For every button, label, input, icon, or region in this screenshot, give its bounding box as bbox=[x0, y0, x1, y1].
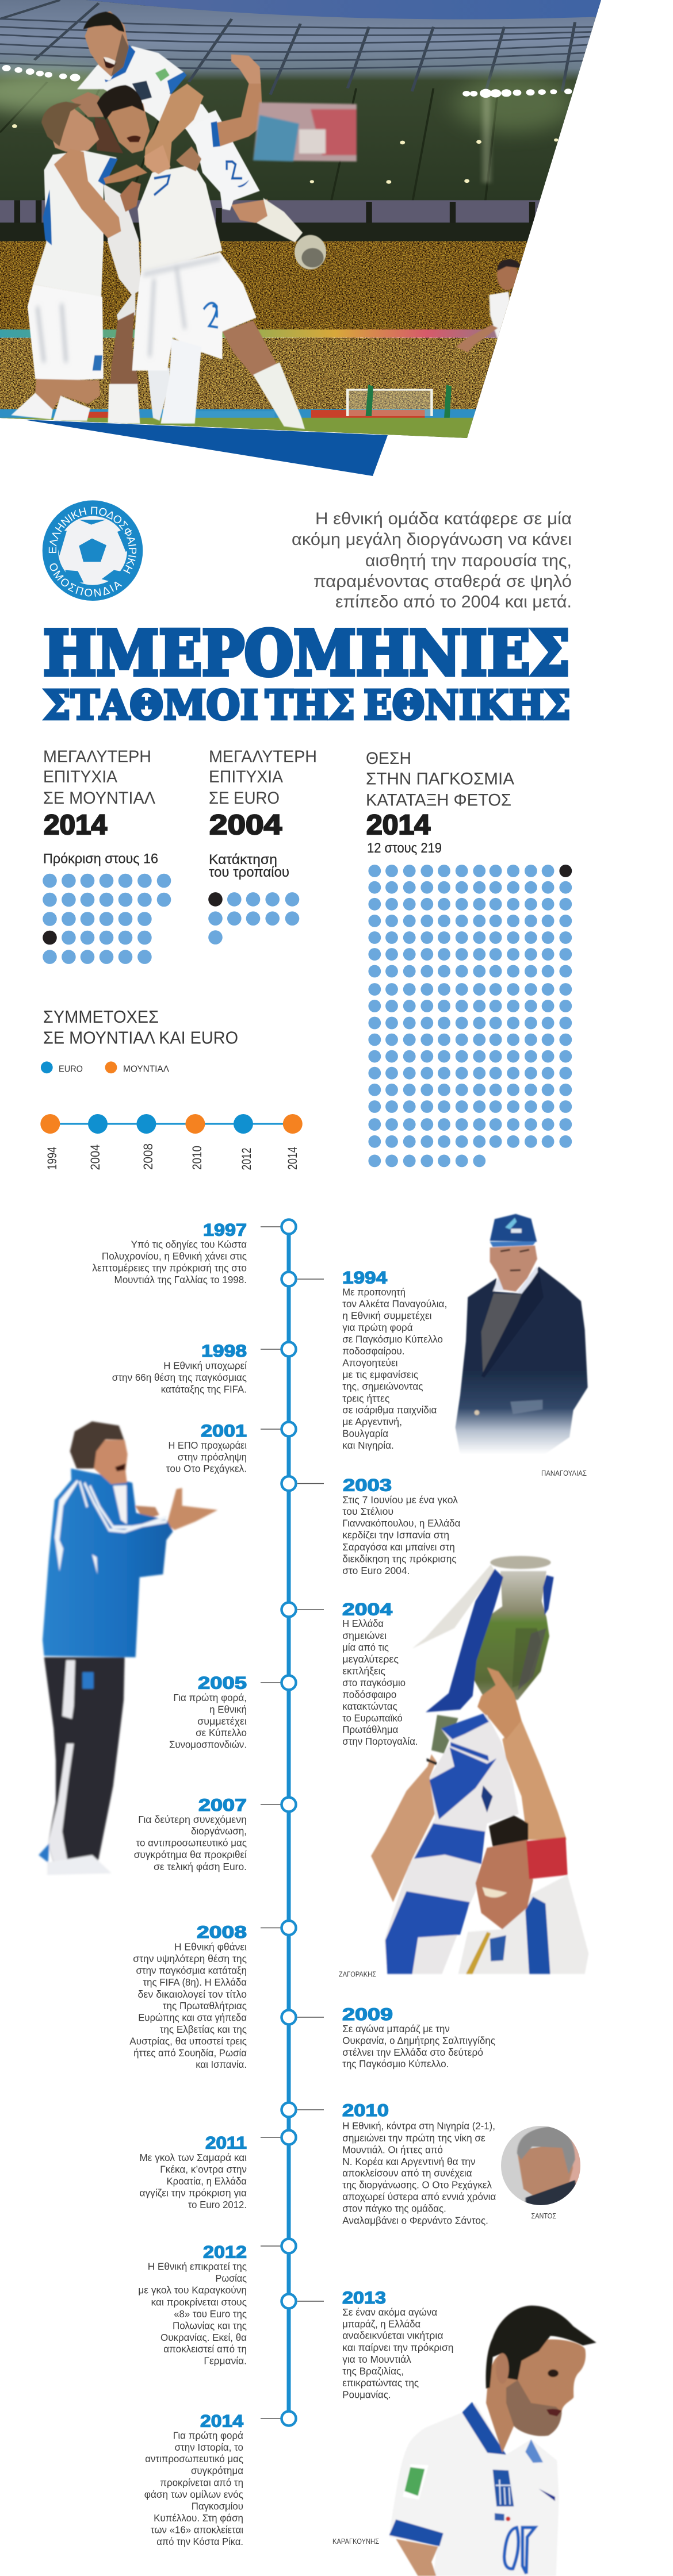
timeline entry: 2010: στον πάγκο της ομάδας. bbox=[342, 2203, 446, 2214]
timeline entry: 2013: Ρουμανίας. bbox=[342, 2389, 391, 2400]
timeline entry: 2011: Με γκολ των Σαμαρά και bbox=[139, 2152, 247, 2163]
timeline entry: 2005: συμμετέχει bbox=[197, 1715, 247, 1727]
timeline entry: 2010: σημειώνει την πρώτη της νίκη σε bbox=[342, 2132, 485, 2144]
title bbox=[43, 617, 571, 729]
timeline entry: 2012: και προκρίνεται στους bbox=[151, 2296, 247, 2308]
timeline entry: 2007: το αντιπροσωπευτικό μας bbox=[136, 1837, 247, 1849]
timeline entry: 2014: αντιπροσωπευτικό μας bbox=[145, 2453, 243, 2464]
panel: FIFA ranking this year bbox=[366, 749, 572, 1167]
timeline entry: 2010: Η Εθνική, κόντρα στη Νιγηρία (2-1), bbox=[342, 2120, 495, 2132]
timeline entry: 1994: της, σημειώνοντας bbox=[342, 1380, 423, 1392]
blue accent wedge bbox=[24, 420, 388, 476]
timeline entry: 2007: διοργάνωση, bbox=[191, 1825, 247, 1837]
timeline entry: 2009: Ουκρανία, ο Δημήτρης Σαλπιγγίδης bbox=[342, 2035, 495, 2047]
dots: 12th of 219 bbox=[368, 865, 572, 1167]
timeline entry: 2004: Πρωτάθλημα bbox=[342, 1724, 398, 1736]
timeline entry: 1994: Βουλγαρία bbox=[342, 1428, 388, 1439]
timeline entry: 1994 bbox=[342, 1269, 447, 1451]
red wristband bbox=[526, 1837, 568, 1879]
timeline entry: 2004: στην Πορτογαλία. bbox=[342, 1736, 418, 1747]
timeline entry: 2005: η Εθνική bbox=[209, 1704, 247, 1715]
timeline entry: 1994: για πρώτη φορά bbox=[342, 1322, 413, 1333]
timeline entry: 1994: με Αργεντινή, bbox=[342, 1416, 402, 1427]
timeline entry: 2012: Γερμανία. bbox=[204, 2355, 247, 2367]
timeline entry: 2008: Ευρώπης και στα γήπεδα bbox=[138, 2012, 247, 2024]
timeline entry: 2013: μπαράζ, η Ελλάδα bbox=[342, 2318, 420, 2329]
timeline entry: 2013: αναδεικνύεται νικήτρια bbox=[342, 2330, 443, 2341]
timeline entry: 2008: της FIFA (8η). Η Ελλάδα bbox=[143, 1976, 247, 1988]
timeline entry: 2009 bbox=[342, 2005, 495, 2070]
timeline entry: 2005: 2005 bbox=[198, 1674, 247, 1693]
timeline entry: 2011: 2011 bbox=[205, 2134, 247, 2153]
logo: Hellenic Football Federation: ΕΛΛΗΝΙΚΗ ΠΟΔΟΣΦΑΙΡΙΚΗ bbox=[48, 507, 137, 574]
stadium video screen bbox=[253, 102, 357, 162]
timeline entry: 2007: συγκρότημα θα προκριθεί bbox=[134, 1849, 247, 1860]
left player head bbox=[41, 102, 99, 152]
timeline entry: 2003: κερδίζει την Ισπανία στη bbox=[342, 1529, 449, 1541]
timeline entry: 2003 bbox=[342, 1476, 460, 1576]
timeline entry: 2003: στο Euro 2004. bbox=[342, 1565, 410, 1576]
timeline entry: 2011: Γκέκα, κ’οντρα στην bbox=[160, 2164, 247, 2175]
intro paragraph: παραμένοντας σταθερά σε ψηλό bbox=[313, 572, 572, 591]
central player number 22 bbox=[132, 164, 305, 429]
stadium background bbox=[0, 0, 609, 448]
timeline entry: 2001: 2001 bbox=[201, 1422, 247, 1441]
timeline entry: 2008: Η Εθνική φθάνει bbox=[174, 1941, 247, 1953]
intro paragraph: αισθητή την παρουσία της, bbox=[365, 551, 572, 570]
panel: biggest Euro success: του τροπαίου bbox=[209, 865, 289, 880]
photo: Rehhagel bbox=[39, 1421, 217, 1875]
timeline entry: 2007: Για δεύτερη συνεχόμενη bbox=[138, 1814, 247, 1825]
timeline entry: 2014: φάση των ομίλων ενός bbox=[144, 2489, 243, 2500]
timeline entry: 2014: στην Ιστορία, το bbox=[175, 2441, 243, 2453]
timeline entry: 2011: το Euro 2012. bbox=[188, 2199, 247, 2210]
timeline entry: 2004 bbox=[342, 1600, 418, 1747]
timeline entry: 2010: της διοργάνωσης. Ο Οτο Ρεχάγκελ bbox=[342, 2179, 492, 2191]
timeline entry: 2009: Σε αγώνα μπαράζ με την bbox=[342, 2023, 450, 2034]
logo: Hellenic Football Federation: ΟΜΟΣΠΟΝΔΙΑ bbox=[49, 563, 122, 597]
timeline entry: 2003: διεκδίκηση της πρόκρισης bbox=[342, 1553, 457, 1564]
timeline entry: 1994: τρεις ήττες bbox=[342, 1392, 389, 1404]
timeline entry: 2010: αποκλείσουν από τη συνέχεια bbox=[342, 2167, 472, 2179]
timeline entry: 2005: Συνομοσπονδιών. bbox=[169, 1739, 247, 1750]
timeline entry: 2012: Ουκρανίας. Εκεί, θα bbox=[160, 2332, 247, 2343]
timeline entry: 2012: 2012 bbox=[203, 2243, 247, 2262]
timeline entry: 2003: 2003 bbox=[343, 1476, 392, 1495]
head and face bbox=[476, 1815, 533, 1929]
caption: Zagorakis: ΖΑΓΟΡΑΚΗΣ bbox=[339, 1971, 376, 1979]
timeline entry: 2001: στην πρόσληψη bbox=[178, 1451, 247, 1462]
big hand on shoulder bbox=[176, 146, 201, 171]
panel: biggest Euro success: 2004 bbox=[209, 810, 282, 840]
tournaments line chart: 2014 bbox=[285, 1147, 300, 1170]
timeline entry: 2013: για το Μουντιάλ bbox=[342, 2354, 411, 2365]
intro paragraph: Η εθνική ομάδα κατάφερε σε μία bbox=[315, 509, 572, 528]
timeline entry: 2007: 2007 bbox=[198, 1796, 247, 1815]
top jumper raised arm bbox=[183, 55, 263, 152]
left player arm and legs bbox=[11, 149, 147, 421]
dots: Euro trophy bbox=[208, 892, 299, 945]
timeline entry: 2014: συγκρότημα bbox=[191, 2465, 243, 2477]
panel: biggest Euro success bbox=[208, 747, 317, 945]
timeline entry: 2008 bbox=[129, 1923, 247, 2070]
timeline entry: 2008: Αυστρίας, θα υποστεί τρεις bbox=[129, 2035, 247, 2047]
panel: biggest Euro success: ΣΕ EURO bbox=[209, 789, 280, 808]
caption: Panagoulias: ΠΑΝΑΓΟΥΛΙΑΣ bbox=[541, 1469, 587, 1477]
timeline entry: 2009: 2009 bbox=[342, 2005, 393, 2024]
timeline entry: 2008: στην υψηλότερη θέση της bbox=[133, 1953, 247, 1964]
timeline axis and nodes bbox=[261, 1220, 324, 2426]
timeline entry: 2008: της Πρωταθλήτριας bbox=[163, 2000, 247, 2011]
timeline entry: 2013 bbox=[342, 2289, 453, 2400]
left player shirt bbox=[28, 151, 118, 381]
tournaments line chart: 2010 bbox=[190, 1146, 204, 1170]
timeline entry: 2014: Για πρώτη φορά bbox=[173, 2429, 243, 2441]
photo: Karagounis bbox=[389, 2306, 596, 2576]
timeline entry: 2004: μία από τις bbox=[342, 1641, 389, 1653]
timeline entry: 2008: δεν δικαιολογεί τον τίτλο bbox=[138, 1988, 247, 2000]
flag bbox=[384, 1714, 519, 1974]
timeline entry: 2013: και παίρνει την πρόκριση bbox=[342, 2342, 453, 2354]
tournaments line chart: 2012 bbox=[239, 1147, 254, 1170]
timeline entry: 1994: σε ισάριθμα παιχνίδια bbox=[342, 1404, 437, 1416]
trophy bbox=[471, 1556, 551, 1700]
legend bbox=[41, 1061, 169, 1074]
timeline entry: 2005 bbox=[169, 1674, 247, 1750]
timeline entry: 2004: 2004 bbox=[342, 1600, 392, 1619]
timeline entry: 2012: «8» του Euro της bbox=[174, 2308, 247, 2320]
panel: biggest World Cup success: Πρόκριση στους 16 bbox=[43, 851, 158, 867]
timeline entry: 2001: του Οτο Ρεχάγκελ. bbox=[166, 1463, 247, 1475]
logo: Hellenic Football Federation bbox=[43, 500, 143, 601]
timeline entry: 2014: Παγκοσμίου bbox=[192, 2501, 243, 2512]
timeline entry: 2001: Η ΕΠΟ προχωράει bbox=[168, 1439, 247, 1451]
timeline entry: 2009: της Παγκόσμιο Κύπελλο. bbox=[342, 2058, 449, 2070]
timeline entry: 2012: Ρωσίας bbox=[215, 2272, 247, 2284]
timeline entry: 2004: σημειώνει bbox=[342, 1630, 387, 1641]
timeline entry: 1994: Με προπονητή bbox=[342, 1287, 406, 1298]
timeline entry: 2013: της Βραζιλίας, bbox=[342, 2365, 404, 2377]
white ribbon bbox=[412, 1564, 495, 1649]
intro paragraph bbox=[292, 509, 572, 612]
timeline entry: 2007 bbox=[134, 1796, 247, 1872]
title: ΗΜΕΡΟΜΗΝΙΕΣ bbox=[43, 617, 570, 690]
panel: biggest World Cup success: ΕΠΙΤΥΧΙΑ bbox=[43, 767, 117, 786]
jersey bbox=[458, 1875, 588, 1974]
timeline entry: 1997: λεπτομέρειες την πρόκρισή της στο bbox=[92, 1262, 247, 1274]
timeline entry: 2008: και Ισπανία. bbox=[196, 2059, 247, 2070]
timeline entry: 1998: στην 66η θέση της παγκόσμιας bbox=[112, 1372, 247, 1383]
timeline entry: 1994: σε Παγκόσμιο Κύπελλο bbox=[342, 1334, 443, 1345]
title: ΣΤΑΘΜΟΙ bbox=[43, 681, 258, 729]
timeline entry: 2014: Κυπέλλου. Στη φάση bbox=[154, 2512, 243, 2524]
title: ΤΗΣ bbox=[265, 681, 355, 729]
tournaments line chart bbox=[40, 1114, 303, 1170]
timeline entry: 2011: αγγίζει την πρόκριση για bbox=[139, 2187, 247, 2198]
timeline entry: 2009: στέλνει την Ελλάδα στο δεύτερό bbox=[342, 2047, 483, 2058]
right arm bbox=[502, 1721, 567, 1840]
timeline entry: 2008: 2008 bbox=[197, 1923, 247, 1942]
photo: Zagorakis with Euro trophy bbox=[371, 1556, 588, 1974]
left arm bbox=[371, 1755, 436, 1902]
timeline entry: 1994: Απογοητεύει bbox=[342, 1357, 398, 1368]
panel: FIFA ranking this year: ΣΤΗΝ ΠΑΓΚΟΣΜΙΑ bbox=[366, 769, 514, 789]
timeline entry: 2014 bbox=[144, 2412, 243, 2547]
timeline entry: 2010 bbox=[342, 2101, 496, 2226]
panel: FIFA ranking this year: ΘΕΣΗ bbox=[366, 749, 411, 768]
timeline entry: 2012: Πολωνίας και της bbox=[173, 2320, 247, 2331]
top jumper shorts and leg bbox=[183, 110, 326, 270]
panel: biggest Euro success: Κατάκτηση bbox=[209, 852, 277, 867]
panel: biggest Euro success: ΕΠΙΤΥΧΙΑ bbox=[209, 767, 283, 786]
timeline entry: 2014: προκρίνεται από τη bbox=[160, 2477, 243, 2489]
timeline entry: 2008: στην παγκόσμια κατάταξη bbox=[136, 1965, 247, 1976]
timeline entry: 1998: 1998 bbox=[201, 1342, 247, 1361]
timeline entry: 2011: Κροατία, η Ελλάδα bbox=[167, 2175, 247, 2187]
timeline entry: 1994: ποδοσφαίρου. bbox=[342, 1345, 405, 1357]
timeline entry: 1997: Πολυχρονίου, η Εθνική χάνει στις bbox=[102, 1250, 247, 1262]
right-side player bbox=[456, 259, 520, 352]
timeline entry: 2013: Σε έναν ακόμα αγώνα bbox=[342, 2306, 437, 2318]
timeline entry: 2014: των «16» αποκλείεται bbox=[151, 2524, 243, 2535]
timeline entry: 2011 bbox=[139, 2134, 247, 2210]
panel: biggest Euro success: ΜΕΓΑΛΥΤΕΡΗ bbox=[209, 747, 317, 766]
timeline entry: 2004: το Ευρωπαϊκό bbox=[342, 1712, 403, 1723]
timeline entry: 2012: αποκλειστεί από τη bbox=[163, 2343, 247, 2355]
tournaments line chart: 1994 bbox=[45, 1147, 59, 1170]
caption: Santos: ΣΑΝΤΟΣ bbox=[531, 2212, 556, 2220]
hero photo: Greek players celebrating in stadium bbox=[0, 0, 609, 448]
timeline entry: 2004: ποδόσφαιρο bbox=[342, 1689, 396, 1700]
photo: Panagoulias bbox=[456, 1214, 588, 1454]
timeline entry: 2003: Γιαννακόπουλου, η Ελλάδα bbox=[342, 1518, 460, 1529]
timeline entry: 2004: κατακτώντας bbox=[342, 1700, 397, 1712]
timeline entry: 2008: της Ελβετίας και της bbox=[160, 2024, 247, 2035]
timeline entry: 1997: Υπό τις οδηγίες του Κώστα bbox=[131, 1238, 247, 1250]
timeline entry: 2001 bbox=[166, 1422, 247, 1475]
panel: biggest World Cup success: ΜΕΓΑΛΥΤΕΡΗ bbox=[43, 747, 151, 766]
timeline entry: 2003: του Στέλιου bbox=[342, 1506, 393, 1517]
timeline entry: 2010: Αναλαμβάνει ο Φερνάντο Σάντος. bbox=[342, 2214, 488, 2226]
timeline entry: 1998 bbox=[112, 1342, 247, 1395]
intro paragraph: ακόμη μεγάλη διοργάνωση να κάνει bbox=[292, 530, 572, 549]
timeline entry: 1994: με τις εμφανίσεις bbox=[342, 1369, 418, 1380]
panel: FIFA ranking this year: 12 στους 219 bbox=[367, 840, 442, 856]
intro paragraph: επίπεδο από το 2004 και μετά. bbox=[335, 592, 572, 612]
caption: Karagounis: ΚΑΡΑΓΚΟΥΝΗΣ bbox=[332, 2537, 379, 2546]
timeline entry: 2004: μεγαλύτερες bbox=[342, 1653, 399, 1665]
timeline entry: 2014: από την Κόστα Ρίκα. bbox=[156, 2536, 243, 2547]
legend: EURO bbox=[59, 1064, 83, 1074]
timeline entry: 2004: Η Ελλάδα bbox=[342, 1618, 384, 1629]
timeline entry: 1997 bbox=[92, 1221, 247, 1285]
timeline entry: 2004: εκπλήξεις bbox=[342, 1665, 385, 1677]
timeline entry: 1994: η Εθνική συμμετέχει bbox=[342, 1310, 432, 1321]
central player head bbox=[95, 85, 150, 153]
timeline entry: 2008: ήττες από Σουηδία, Ρωσία bbox=[133, 2047, 247, 2059]
timeline entry: 2003: Στις 7 Ιουνίου με ένα γκολ bbox=[342, 1494, 458, 1506]
photo: Santos portrait bbox=[500, 2125, 584, 2206]
timeline entry: 2010: αποχωρεί ύστερα από εννιά χρόνια bbox=[342, 2191, 496, 2202]
timeline entry: 1998: κατάταξης της FIFA. bbox=[161, 1383, 247, 1395]
top jumper head bbox=[83, 11, 129, 76]
timeline entry: 1994: 1994 bbox=[342, 1269, 387, 1288]
screen-side hand of central player bbox=[120, 181, 141, 212]
panel: biggest World Cup success: 2014 bbox=[44, 810, 107, 840]
panel: FIFA ranking this year: ΚΑΤΑΤΑΞΗ ΦΕΤΟΣ bbox=[366, 791, 511, 810]
timeline entry: 2007: σε τελική φάση Euro. bbox=[154, 1861, 247, 1872]
timeline entry: 2012: με γκολ του Καραγκούνη bbox=[138, 2285, 247, 2296]
timeline entry: 1994: και Νιγηρία. bbox=[342, 1439, 394, 1451]
top jumper arm across bbox=[70, 83, 204, 175]
legend: ΜΟΥΝΤΙΑΛ bbox=[123, 1064, 169, 1074]
timeline entry: 2014: 2014 bbox=[200, 2412, 243, 2431]
timeline entry: 1997: 1997 bbox=[203, 1221, 247, 1239]
timeline entry: 1994: τον Αλκέτα Παναγούλια, bbox=[342, 1298, 447, 1310]
timeline entry: 2013: επικρατώντας της bbox=[342, 2377, 419, 2389]
timeline entry: 1997: Μουντιάλ της Γαλλίας το 1998. bbox=[114, 1274, 247, 1285]
tournaments line chart: 2004 bbox=[88, 1144, 102, 1170]
tournaments line chart: 2008 bbox=[141, 1143, 155, 1170]
middle hidden player bbox=[104, 184, 170, 424]
title: ΕΘΝΙΚΗΣ bbox=[364, 681, 571, 729]
top jumper torso bbox=[77, 45, 211, 134]
dots: World Cup round of 16 bbox=[43, 874, 171, 964]
timeline entry: 2013: 2013 bbox=[342, 2289, 386, 2308]
panel: FIFA ranking this year: 2014 bbox=[366, 810, 430, 840]
timeline entry: 2003: Σαραγόσα και μπαίνει στη bbox=[342, 1541, 455, 1553]
timeline entry: 2010: Μουντιάλ. Οι ήττες από bbox=[342, 2144, 443, 2155]
fist bbox=[144, 145, 171, 174]
panel: participations in World Cup and Euro: ΣΥΜΜΕΤΟΧΕΣ bbox=[43, 1007, 159, 1027]
timeline entry: 2010: 2010 bbox=[342, 2101, 389, 2120]
marble base bbox=[431, 1715, 458, 1753]
timeline entry: 2005: Για πρώτη φορά, bbox=[173, 1692, 247, 1703]
panel: biggest World Cup success: ΣΕ ΜΟΥΝΤΙΑΛ bbox=[43, 789, 155, 808]
timeline entry: 2005: σε Κύπελλο bbox=[196, 1727, 247, 1738]
panel: participations in World Cup and Euro: ΣΕ ΜΟΥΝΤΙΑΛ ΚΑΙ EURO bbox=[43, 1027, 238, 1047]
timeline entry: 2010: Ν. Κορέα και Αργεντινή θα την bbox=[342, 2156, 476, 2167]
central pentagon with map of Greece bbox=[79, 539, 106, 562]
blue ribbons bbox=[426, 1569, 503, 1712]
timeline entry: 2012: Η Εθνική επικρατεί της bbox=[148, 2261, 247, 2272]
timeline entry: 2004: στο παγκόσμιο bbox=[342, 1677, 406, 1688]
panel: biggest World Cup success bbox=[43, 747, 171, 964]
panel: participations in World Cup and Euro bbox=[40, 1007, 303, 1170]
celebrating players bbox=[11, 11, 326, 429]
timeline entry: 1998: Η Εθνική υποχωρεί bbox=[163, 1360, 247, 1372]
timeline entry: 2012 bbox=[138, 2243, 247, 2367]
hand on trophy bbox=[477, 1668, 522, 1740]
